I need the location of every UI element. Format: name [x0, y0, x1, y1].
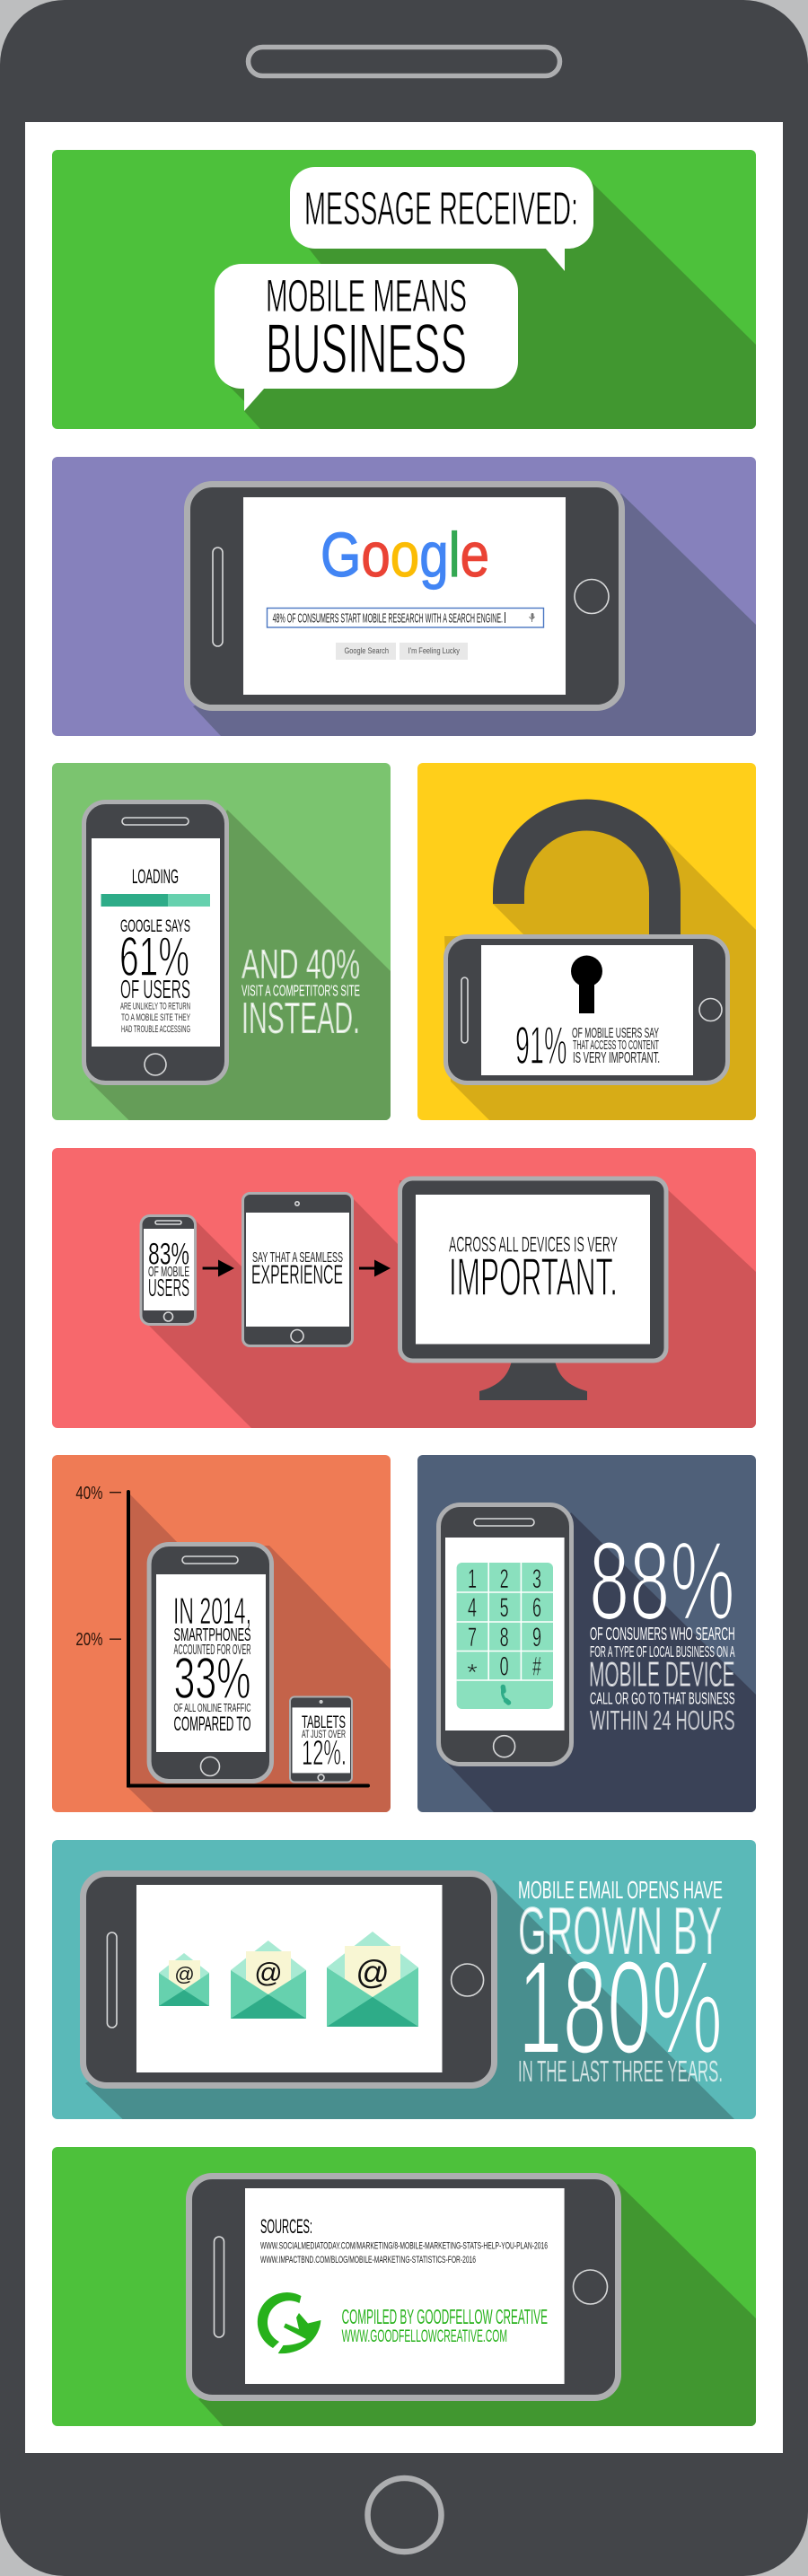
- phone landscape: [445, 937, 727, 1082]
- chart axis: [75, 1484, 368, 1786]
- text: and 40%: INSTEAD.: [242, 994, 360, 1043]
- phone portrait: [84, 802, 226, 1082]
- text: and 40%: AND 40%: [242, 941, 360, 987]
- speech bubble: mobile means business: BUSINESS: [266, 309, 467, 388]
- speech bubble: message received: MESSAGE RECEIVED:: [304, 183, 578, 235]
- icon: medium envelope: [231, 1941, 306, 2019]
- sources text: [260, 2215, 548, 2265]
- phone bar: OF ALL ONLINE TRAFFIC: [174, 1702, 251, 1714]
- icon: handset: [503, 1687, 508, 1703]
- credit text: WWW.GOODFELLOWCREATIVE.COM: [342, 2327, 507, 2346]
- text: and 40%: [242, 941, 360, 1043]
- stat text: 91%: OF MOBILE USERS SAY: [572, 1026, 659, 1041]
- speech bubble: mobile means business: MOBILE MEANS: [266, 270, 467, 321]
- stat text: 61%: GOOGLE SAYS: [120, 916, 190, 936]
- dial keypad: 6: [532, 1593, 541, 1623]
- padlock shackle: [508, 815, 665, 942]
- phone bar: SMARTPHONES: [174, 1625, 251, 1645]
- stat text: 61%: OF USERS: [120, 976, 190, 1004]
- phone with keypad: [438, 1504, 571, 1765]
- stat text: 61%: HAD TROUBLE ACCESSING: [121, 1024, 190, 1035]
- arrow: [359, 1260, 391, 1276]
- arrow: [203, 1260, 234, 1276]
- monitor: ACROSS ALL DEVICES IS VERY: [449, 1233, 618, 1257]
- tablet bar: [290, 1696, 352, 1783]
- sources text: SOURCES:: [260, 2215, 312, 2238]
- phone bar: ACCOUNTED FOR OVER: [174, 1643, 251, 1658]
- phone landscape: [189, 2176, 618, 2398]
- long shadow: [90, 810, 391, 1120]
- icon: goodfellow logo: [258, 2292, 321, 2353]
- text: and 40%: VISIT A COMPETITOR'S SITE: [242, 982, 360, 1000]
- phone bar: COMPARED TO: [174, 1713, 251, 1735]
- long shadow: [127, 1494, 391, 1812]
- long shadow: [444, 812, 756, 1120]
- search box: [268, 609, 544, 627]
- credit text: COMPILED BY GOODFELLOW CREATIVE: [342, 2305, 548, 2328]
- dial keypad: 2: [500, 1564, 509, 1594]
- panel: padlock: [417, 763, 756, 1120]
- tablet: [242, 1194, 352, 1346]
- panel: mobile email: [52, 1840, 756, 2119]
- sources text: WWW.IMPACTBND.COM/BLOG/MOBILE-MARKETING-STATISTICS-FOR-2016: [260, 2255, 476, 2265]
- stat text: 91%: 91%: [515, 1015, 567, 1075]
- long shadow: [193, 494, 756, 736]
- monitor: IMPORTANT.: [449, 1248, 618, 1307]
- icon: home button: [368, 2478, 442, 2552]
- dial keypad: *: [467, 1659, 478, 1686]
- panel: seamless experience: [52, 1148, 756, 1428]
- small phone: [141, 1215, 196, 1325]
- long shadow: [198, 2184, 756, 2426]
- panel: title: [52, 150, 756, 429]
- icon: medium envelope: @: [254, 1957, 283, 1988]
- search box: 48% OF CONSUMERS START MOBILE RESEARCH WITH A SEARCH ENGINE.: [273, 611, 503, 626]
- long shadow: [145, 1180, 756, 1428]
- tablet: SAY THAT A SEAMLESS: [252, 1250, 343, 1266]
- icon: keyhole: [571, 955, 602, 1013]
- loading bar: LOADING: [132, 865, 179, 888]
- dial keypad: 4: [468, 1593, 477, 1623]
- icon: large envelope: @: [356, 1954, 390, 1991]
- speech bubble: mobile means business: [215, 264, 518, 411]
- panel: loading stat: [52, 763, 391, 1120]
- panel: padlock: THAT ACCESS TO CONTENT: [573, 1038, 659, 1053]
- stat text: 61%: ARE UNLIKELY TO RETURN: [120, 1002, 190, 1012]
- credit text: [342, 2305, 548, 2346]
- loading bar: [101, 865, 210, 907]
- long shadow: [228, 180, 756, 429]
- monitor: [400, 1178, 666, 1400]
- icon: small envelope: @: [174, 1963, 195, 1985]
- panel: google search: [52, 457, 756, 736]
- panel: local search dial pad: [417, 1455, 756, 1812]
- panel: sources: [52, 2147, 756, 2426]
- stat text: 61%: [119, 916, 190, 1035]
- panel: online traffic chart: [52, 1455, 391, 1812]
- stat text: 88%: 88%: [589, 1520, 735, 1643]
- icon: large envelope: [327, 1932, 418, 2027]
- small phone: 83%: [148, 1237, 189, 1271]
- phone landscape: [187, 485, 621, 707]
- dial keypad: [457, 1563, 553, 1709]
- dial keypad: 3: [532, 1564, 541, 1594]
- tablet bar: TABLETS: [302, 1713, 346, 1732]
- dial keypad: 1: [468, 1564, 477, 1594]
- search buttons: I'm Feeling Lucky: [408, 646, 460, 655]
- long shadow: [85, 1880, 734, 2119]
- dial keypad: 8: [500, 1623, 509, 1652]
- dial keypad: 7: [468, 1623, 477, 1652]
- dial keypad: #: [532, 1652, 541, 1682]
- phone bar: 33%: [174, 1645, 251, 1711]
- stat text: 88%: [589, 1520, 735, 1736]
- speech bubble: message received: [290, 167, 593, 271]
- chart axis: 20%: [75, 1630, 102, 1650]
- tablet bar: AT JUST OVER: [302, 1729, 346, 1740]
- small phone: USERS: [148, 1274, 189, 1301]
- dial keypad: 0: [500, 1652, 509, 1682]
- sources text: WWW.SOCIALMEDIATODAY.COM/MARKETING/8-MOBILE-MARKETING-STATS-HELP-YOU-PLAN-2016: [260, 2241, 548, 2252]
- stat text: 61%: 61%: [119, 925, 189, 988]
- phone bar: IN 2014,: [173, 1590, 251, 1632]
- icon: small envelope: [159, 1953, 209, 2006]
- long shadow: [444, 1512, 756, 1812]
- phone bar: [149, 1544, 271, 1781]
- stat text: 61%: TO A MOBILE SITE THEY: [121, 1012, 190, 1023]
- phone landscape: [83, 1874, 494, 2086]
- tablet: EXPERIENCE: [251, 1260, 343, 1290]
- small phone: OF MOBILE: [148, 1265, 189, 1280]
- dial keypad: 9: [532, 1623, 541, 1652]
- tablet bar: 12%.: [302, 1734, 347, 1773]
- google logo: Google: [321, 520, 489, 590]
- dial keypad: 5: [500, 1593, 509, 1623]
- search buttons: [336, 643, 468, 660]
- stat text: 180%: [518, 1876, 723, 2089]
- icon: top speaker slot: [248, 47, 560, 75]
- chart axis: 40%: [75, 1484, 102, 1503]
- stat text: 91%: IS VERY IMPORTANT.: [573, 1048, 660, 1066]
- search buttons: Google Search: [345, 646, 389, 655]
